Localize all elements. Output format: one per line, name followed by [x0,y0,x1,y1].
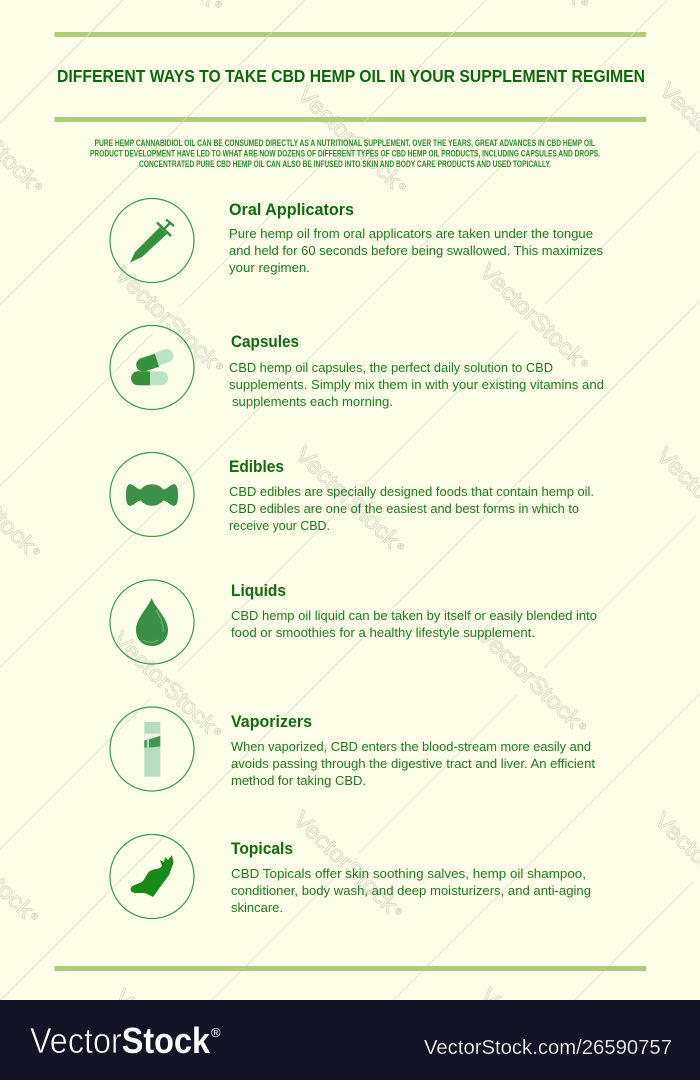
panel: oral applicators [110,198,603,282]
body text: your regimen. [229,260,310,275]
watermark: ® [212,725,224,737]
icon: candy [110,452,194,536]
heading: Edibles [229,457,284,476]
icon: vaporizer [110,707,194,791]
heading: Oral Applicators [229,200,354,219]
body text [231,739,595,788]
watermark: ® [577,720,589,732]
bottom rule [54,966,646,971]
body text [229,360,604,409]
body text [231,866,591,915]
watermark: ® [214,360,226,372]
heading: Topicals [231,839,293,858]
body text [229,484,594,533]
panel: edibles [110,452,594,536]
body text: CBD Topicals offer skin soothing salves, hemp oil shampoo, [231,866,586,881]
watermark: ® [395,540,407,552]
watermark: VectorStock [110,261,224,373]
heading: Capsules [231,332,299,351]
body text: When vaporized, CBD enters the blood-stream more easily and [231,739,591,754]
body text: CBD hemp oil capsules, the perfect daily solution to CBD [229,360,553,375]
footer logo: VectorStock [30,1020,211,1061]
icon: capsules [110,326,194,410]
top rule [54,32,646,37]
body text: avoids passing through the digestive tract and liver. An efficient [231,756,595,771]
body text: and held for 60 seconds before being swallowed. This maximizes [229,243,603,258]
body text: CBD hemp oil liquid can be taken by itself or easily blended into [231,608,597,623]
footer bar [0,1000,700,1080]
watermark: VectorStock [289,806,403,918]
panel: vaporizers [110,707,595,791]
body text: CBD edibles are specially designed foods that contain hemp oil. [229,484,594,499]
body text: food or smoothies for a healthy lifestyle supplement. [231,625,535,640]
footer url: VectorStock.com/26590757 [424,1037,672,1059]
watermark: VectorStock [293,81,407,193]
watermark: V [110,984,139,1014]
panel: liquids [110,580,597,664]
body text: conditioner, body wash, and deep moisturizers, and anti-aging [231,883,591,898]
heading: Liquids [231,581,286,600]
body text [229,226,603,275]
watermark: ® [393,905,405,917]
watermark: ® [579,357,591,369]
watermark: ® [29,910,41,922]
body text: CBD edibles are one of the easiest and best forms in which to [229,501,579,516]
watermark: ® [31,545,43,557]
body text: Pure hemp oil from oral applicators are taken under the tongue [229,226,593,241]
watermark: ® [33,180,45,192]
watermark: VectorStock [291,441,405,553]
icon: hand [110,834,194,918]
panel: topicals [110,834,591,918]
body text: supplements each morning. [232,394,393,409]
body text: skincare. [231,900,283,915]
body text [231,608,597,640]
watermark: VectorStock [475,258,589,370]
watermark: VectorStock [108,626,222,738]
body text: supplements. Simply mix them in with your existing vitamins and [229,377,604,392]
watermark: VectorStock [473,621,587,733]
icon: drop [110,580,194,664]
body text: method for taking CBD. [231,773,366,788]
body text: receive your CBD. [229,518,330,533]
title: DIFFERENT WAYS TO TAKE CBD HEMP OIL IN YOUR SUPPLEMENT REGIMEN [57,66,645,86]
intro text [90,138,600,170]
panel: capsules [110,326,604,410]
watermark: ® [397,180,409,192]
title lower rule [54,117,646,122]
registered mark: ® [211,1025,221,1040]
heading: Vaporizers [231,712,312,731]
icon: syringe [110,198,194,282]
watermark: V [476,983,505,1013]
